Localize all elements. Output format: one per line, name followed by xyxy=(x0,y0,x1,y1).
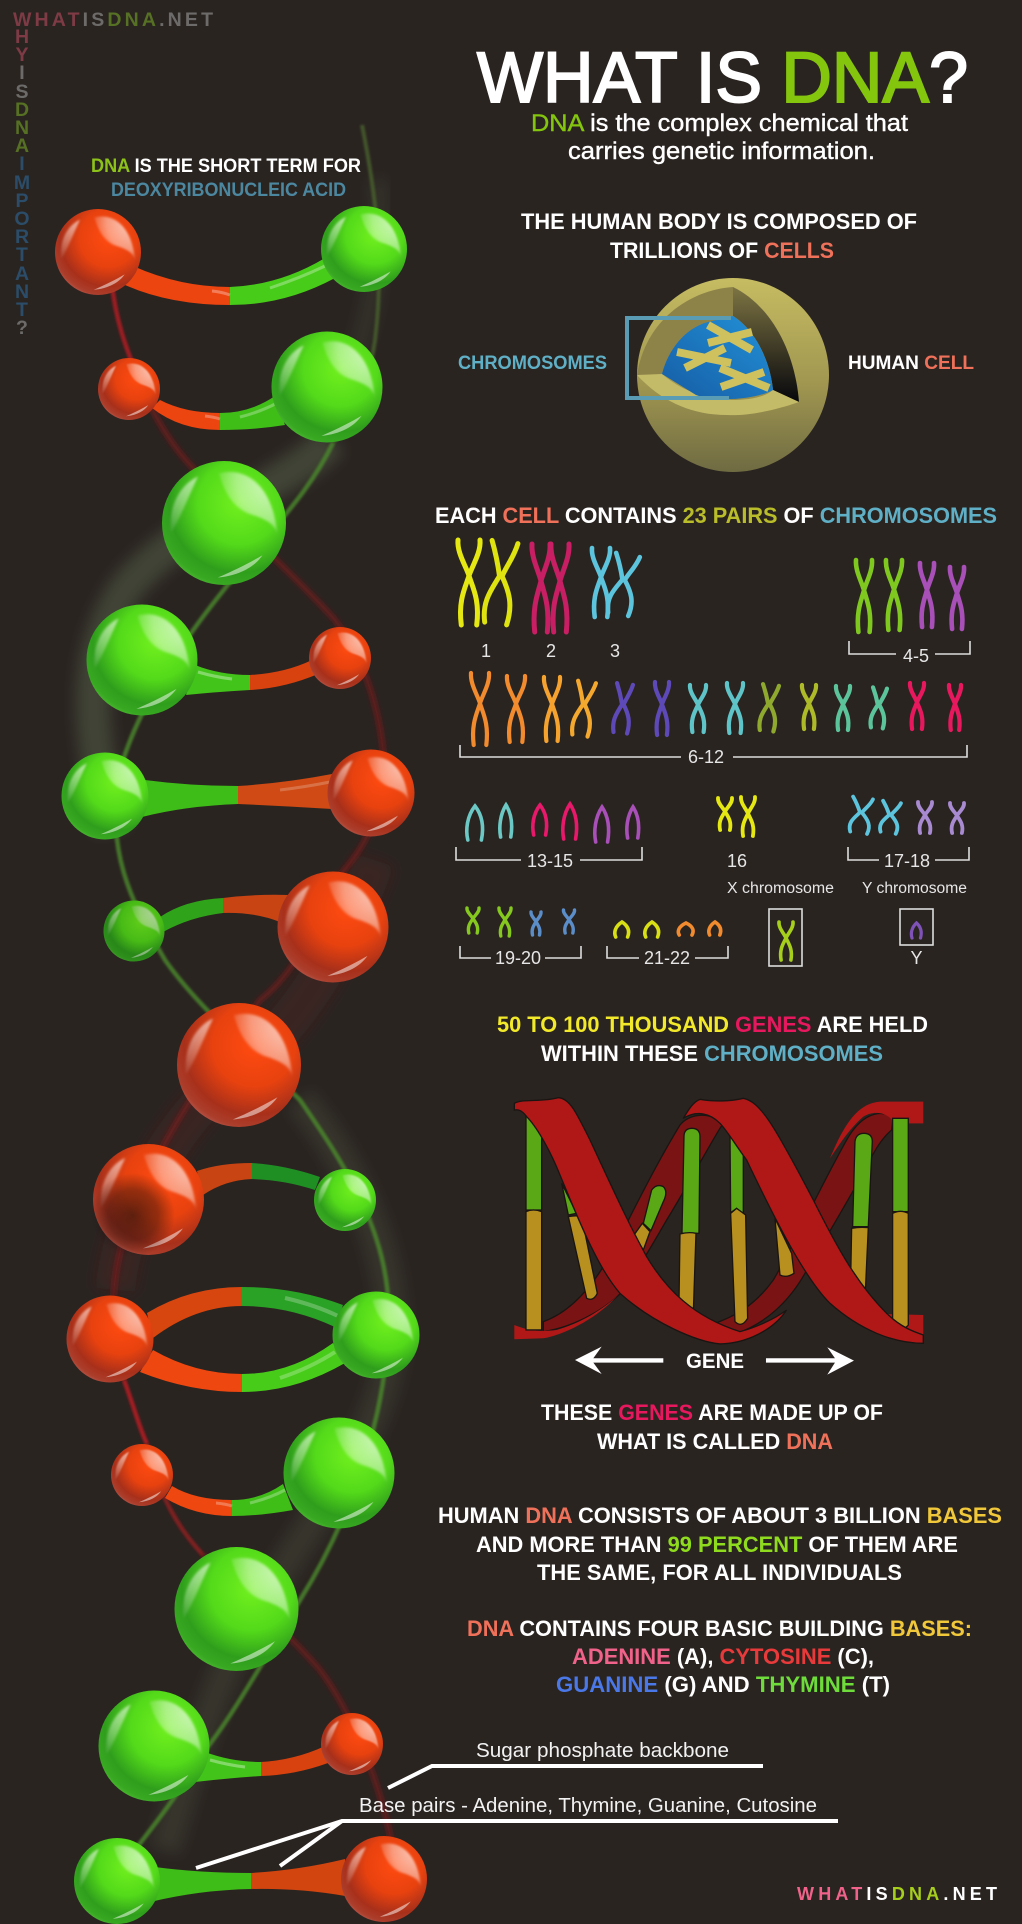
chromosome group: 16 xyxy=(718,797,755,836)
diagram: gene double helix xyxy=(514,1098,923,1375)
bracket: 19-20: 19-20 xyxy=(495,948,541,968)
bracket: 13-15: 13-15 xyxy=(527,851,573,871)
diagram: human cell cutaway xyxy=(627,278,829,472)
subheading: dna short term xyxy=(91,155,361,201)
heading: genes xyxy=(497,1012,928,1066)
bracket: 6-12: 6-12 xyxy=(688,747,724,767)
molecule: base pair 6 xyxy=(91,1144,376,1257)
arrow: gene right xyxy=(766,1347,854,1375)
watermark: whatisdna.net top: WHATISDNA.NET xyxy=(13,9,213,31)
label: x chromosome: X chromosome xyxy=(727,880,834,897)
arrow: gene left xyxy=(575,1347,663,1374)
heading: trillions of cells: THE HUMAN BODY IS COMPOSED OF xyxy=(521,209,917,234)
chromosome group: 3 xyxy=(592,548,640,617)
label: human cell: HUMAN CELL xyxy=(848,352,974,374)
watermark: whatisdna.net bottom: WHATISDNA.NET xyxy=(797,1884,997,1904)
molecule: base pair 2 xyxy=(98,332,382,442)
molecule: base pair 3 xyxy=(86,604,371,716)
text: 3 billion bases xyxy=(438,1503,1002,1585)
text: genes made of dna xyxy=(541,1400,883,1454)
heading: genes: WITHIN THESE CHROMOSOMES xyxy=(541,1041,883,1066)
text: genes made of dna: THESE GENES ARE MADE UP OF xyxy=(541,1400,883,1425)
text: four bases: GUANINE (G) AND THYMINE (T) xyxy=(556,1672,890,1697)
chromosome group: 13-15 xyxy=(467,804,639,842)
callout: sugar phosphate backbone: Sugar phosphate backbone xyxy=(476,1740,729,1762)
intro text: DNA is the complex chemical that xyxy=(531,110,908,137)
bracket: 17-18: 17-18 xyxy=(884,851,930,871)
callout: base pairs: Base pairs - Adenine, Thymine, Guanine, Cutosine xyxy=(359,1795,817,1817)
label: chromosomes: CHROMOSOMES xyxy=(458,352,607,374)
bracket: 21-22 xyxy=(607,946,728,968)
text: 3 billion bases: THE SAME, FOR ALL INDIVIDUALS xyxy=(537,1560,902,1585)
chromosome numbers 1 2 3 xyxy=(481,641,620,661)
chromosome numbers 1 2 3: 2 xyxy=(546,641,556,661)
bracket: 4-5: 4-5 xyxy=(903,646,929,666)
molecule: base pair 7 double bond xyxy=(66,1287,420,1392)
label: 16: 16 xyxy=(727,851,747,871)
bracket: 21-22: 21-22 xyxy=(644,948,690,968)
text: four bases xyxy=(467,1616,972,1697)
green base segments xyxy=(526,1117,908,1233)
bracket: 13-15 xyxy=(456,847,642,871)
callout: base pairs xyxy=(196,1795,838,1868)
text: genes made of dna: WHAT IS CALLED DNA xyxy=(597,1429,833,1454)
text: 3 billion bases: HUMAN DNA CONSISTS OF ABOUT 3 BILLION BASES xyxy=(438,1503,1002,1528)
chromosome group: 1 xyxy=(458,540,518,625)
bracket: 19-20 xyxy=(460,946,581,968)
label: y chromosome: Y chromosome xyxy=(862,880,967,897)
intro text xyxy=(531,110,908,165)
molecule: base pair 1 xyxy=(55,206,407,305)
x chromosome box xyxy=(769,909,802,966)
text: four bases: DNA CONTAINS FOUR BASIC BUILDING BASES: xyxy=(467,1616,972,1641)
molecule: base pair 9 xyxy=(98,1690,383,1802)
title: WHAT IS DNA? xyxy=(477,39,968,118)
front ribbons xyxy=(514,1098,923,1344)
chromosome group: 19-20 xyxy=(467,908,575,936)
heading: trillions of cells xyxy=(521,209,917,263)
vertical text: why is dna important: HYISDNAIMPORTANT? xyxy=(14,26,30,339)
chromosome numbers 1 2 3: 3 xyxy=(610,641,620,661)
side ribbons xyxy=(514,1102,923,1339)
chromosome group: 17-18 xyxy=(848,797,964,834)
text: four bases: ADENINE (A), CYTOSINE (C), xyxy=(572,1644,874,1669)
subheading: dna short term: DNA IS THE SHORT TERM FOR xyxy=(91,155,361,177)
text: 3 billion bases: AND MORE THAN 99 PERCENT OF THEM ARE xyxy=(476,1532,958,1557)
subheading: dna short term: DEOXYRIBONUCLEIC ACID xyxy=(111,179,346,201)
molecule: base pair 8 xyxy=(111,1418,394,1528)
molecule: lower green sphere xyxy=(174,1547,298,1671)
chromosome numbers 1 2 3: 1 xyxy=(481,641,491,661)
molecule: central green sphere xyxy=(162,461,286,585)
molecule: central red sphere xyxy=(177,1003,301,1127)
molecule: base pair 10 xyxy=(74,1836,427,1924)
gold base segments xyxy=(526,1208,908,1330)
heading: trillions of cells: TRILLIONS OF CELLS xyxy=(610,238,834,263)
chromosome group: 2 xyxy=(532,544,569,632)
chromosome group: 6-12 xyxy=(471,673,961,745)
chromosome group: 4-5 xyxy=(856,560,964,632)
back ribbons xyxy=(543,1114,893,1333)
molecule: base pair 5 xyxy=(104,872,388,982)
helix strands and ribbons xyxy=(93,125,392,1850)
callout: sugar phosphate backbone xyxy=(388,1740,763,1788)
label: gene: GENE xyxy=(686,1350,744,1373)
intro text: carries genetic information. xyxy=(568,138,875,165)
y chromosome box: Y xyxy=(910,948,923,968)
bracket: 17-18 xyxy=(848,847,969,871)
y chromosome box xyxy=(900,909,933,968)
chromosome group: 21-22 xyxy=(615,922,721,937)
heading: 23 pairs: EACH CELL CONTAINS 23 PAIRS OF CHROMOSOMES xyxy=(435,503,997,528)
molecule: base pair 4 xyxy=(62,750,414,840)
bracket: 4-5 xyxy=(849,641,970,666)
bracket: 6-12 xyxy=(460,745,967,767)
heading: genes: 50 TO 100 THOUSAND GENES ARE HELD xyxy=(497,1012,928,1037)
